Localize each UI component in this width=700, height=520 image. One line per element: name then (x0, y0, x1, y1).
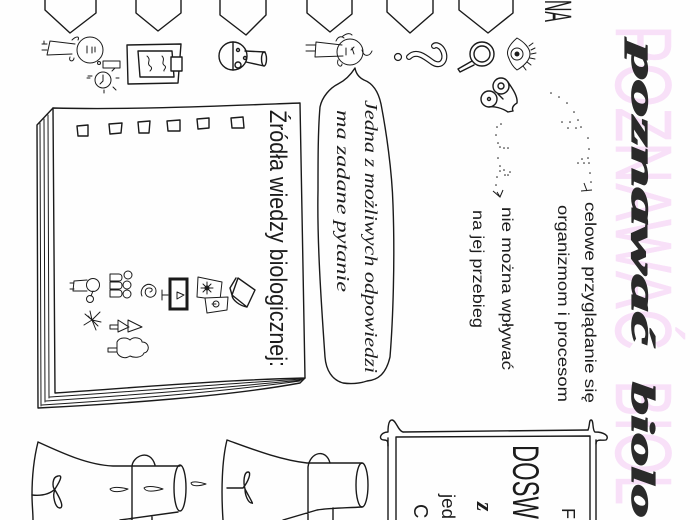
frame text fragments: jed (438, 493, 458, 519)
icon: group of people (110, 271, 132, 298)
dotted arrow: observation definition (550, 92, 592, 191)
text: no influence on the course (469, 207, 515, 370)
heading: pink background lettering: POZNAWAĆ (599, 25, 688, 350)
notepad panel: sources of biological knowledge (37, 103, 305, 408)
notepad page outline (37, 103, 305, 408)
arrow tags row (45, 0, 513, 35)
text: observation definition: celowe przyglądanie się (581, 202, 598, 403)
icon: binoculars (481, 78, 517, 112)
icon: photographs (197, 277, 228, 313)
frame border (381, 420, 607, 520)
dotted arrow: no influence (493, 123, 511, 197)
bubble text (333, 100, 381, 373)
icon: person thinking (306, 34, 372, 66)
icon: book (230, 278, 255, 307)
bubble text: ma zadane pytanie (333, 110, 353, 292)
frame text fragments: z (471, 501, 497, 512)
text: no influence on the course: na jej przebieg (469, 210, 486, 328)
frame text fragments (409, 493, 578, 519)
text: NA (536, 0, 578, 22)
heading: dark handwritten title: biolo (624, 382, 660, 518)
icon: big tree (108, 338, 148, 358)
icon: insect flower (84, 311, 101, 330)
experiment flask right (222, 440, 368, 520)
bubble text: Jedna z możliwych odpowiedzi (361, 100, 381, 373)
icon: eye (507, 38, 536, 70)
heading: dark handwritten title (624, 36, 660, 518)
text: observation definition (554, 202, 598, 403)
icon: person with balloon (70, 278, 100, 302)
experiment flask left (32, 442, 206, 520)
notepad title: Źródła wiedzy biologicznej: (264, 110, 291, 367)
framed panel: experiment (381, 420, 607, 520)
icon: laboratory flask (219, 42, 266, 70)
frame text fragments: F (558, 508, 578, 519)
icon: person with clock (42, 37, 120, 93)
speech bubble: hypothesis (318, 68, 394, 384)
icon: monitor with video (162, 279, 187, 309)
icon: spiral (141, 284, 156, 297)
icon: question mark (394, 45, 444, 64)
notepad binding squares (77, 117, 244, 136)
text: no influence on the course: nie można wpływać (498, 207, 515, 370)
icon: clipboard (127, 44, 182, 84)
frame text fragments: C (409, 504, 431, 518)
icon: magnifying glass (458, 42, 494, 72)
icon: small trees (110, 320, 142, 332)
heading: dark handwritten title: poznawać (624, 36, 660, 348)
text: observation definition: organizmom i procesom (554, 205, 571, 402)
